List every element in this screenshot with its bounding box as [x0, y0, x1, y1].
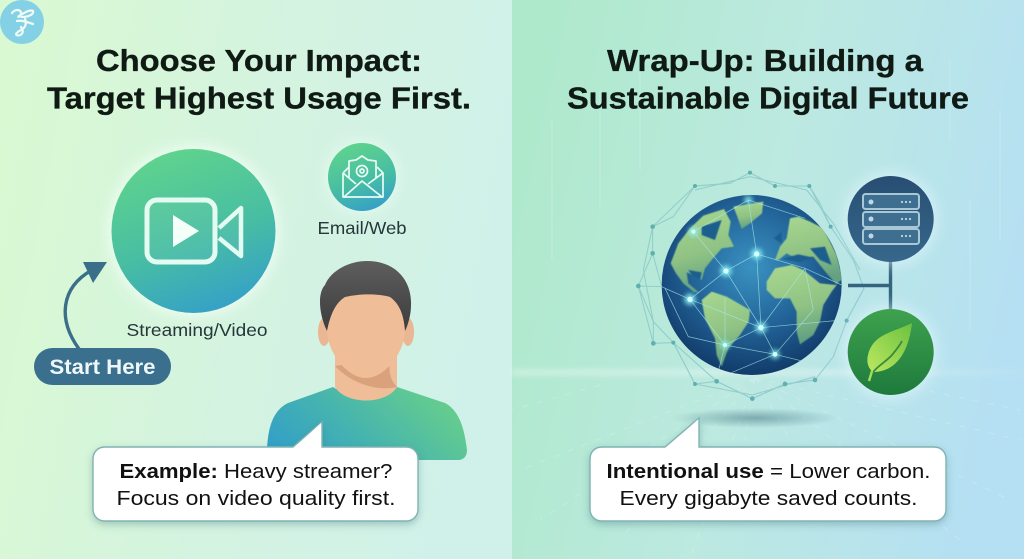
label: email web: Email/Web [318, 218, 406, 238]
label: streaming video: Streaming/Video [126, 320, 268, 340]
heading: choose your impact: Target Highest Usage First. [47, 80, 471, 116]
pill: start here: Start Here [50, 355, 156, 379]
heading: wrap-up: Sustainable Digital Future [567, 80, 969, 116]
person illustration [267, 261, 467, 460]
heading: choose your impact: Choose Your Impact: [96, 43, 422, 78]
icon: leaf [845, 306, 937, 398]
callout: example: Focus on video quality first. [116, 487, 396, 510]
icon: streaming video circle [108, 146, 278, 316]
callout: intentional use [590, 418, 946, 521]
icon: server [845, 173, 937, 265]
pill: start here [34, 348, 171, 385]
outer network cage [636, 171, 864, 401]
network lines on globe [662, 200, 842, 373]
heading: wrap-up: Wrap-Up: Building a [607, 43, 924, 78]
callout: example: Example: Heavy streamer? [120, 460, 392, 483]
connector lines [848, 260, 890, 310]
heading: choose your impact [47, 43, 471, 116]
icon: email circle [326, 141, 398, 213]
globe [662, 195, 843, 375]
callout: intentional use: Intentional use = Lower carbon. [606, 460, 930, 483]
shadow under globe [671, 408, 839, 428]
callout: intentional use: Every gigabyte saved counts. [620, 487, 918, 510]
arrow: start here to video [65, 262, 107, 349]
panel: wrap-up [512, 0, 1024, 559]
heading: wrap-up [567, 43, 969, 116]
panel: choose your impact [0, 0, 512, 559]
callout: example [93, 422, 418, 521]
logo badge [0, 0, 44, 44]
